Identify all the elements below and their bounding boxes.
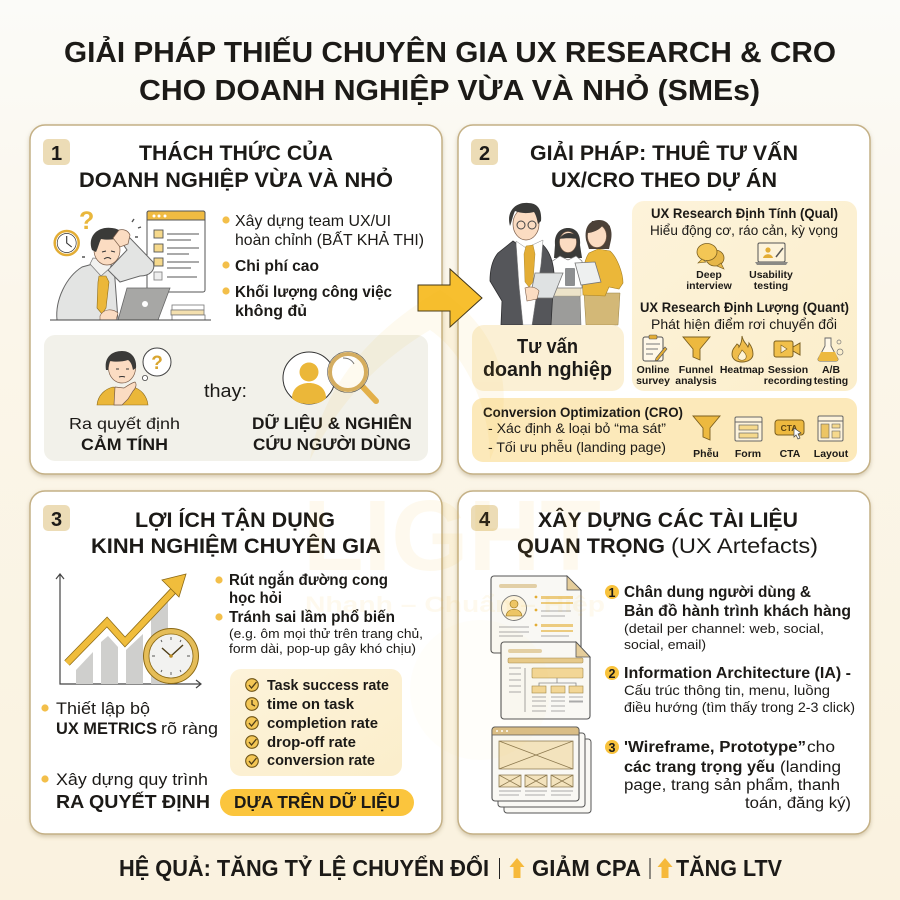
icon: session recording: Session bbox=[768, 364, 808, 376]
icon: cta button: CTA bbox=[780, 448, 801, 460]
item 3: wireframe and prototype: cho bbox=[807, 739, 835, 756]
icon: funnel analysis: analysis bbox=[675, 375, 717, 387]
heading: solution: GIẢI PHÁP: THUÊ TƯ VẤN bbox=[530, 140, 798, 165]
label: business consulting: doanh nghiệp bbox=[483, 358, 612, 381]
footer: results bbox=[119, 853, 783, 881]
heading: artefacts: QUAN TRỌNG bbox=[517, 534, 665, 558]
caption: gut feeling: Ra quyết định bbox=[69, 416, 180, 433]
icon: session recording bbox=[764, 341, 812, 387]
title bbox=[64, 36, 836, 107]
pill: data driven bbox=[220, 789, 414, 816]
icon: cta button: CTA bbox=[781, 423, 797, 433]
label: business consulting bbox=[472, 325, 624, 391]
panel: challenges bbox=[30, 125, 442, 474]
text: instead of: thay: bbox=[204, 381, 247, 401]
watermark: LIGHT bbox=[303, 480, 601, 592]
item 1: persona and journey map: Chân dung người dùng & bbox=[624, 584, 811, 601]
bullet list: challenges: Chi phí cao bbox=[235, 258, 319, 275]
bullet: ux metrics bbox=[41, 699, 218, 738]
icon: usability testing: Usability bbox=[749, 269, 793, 281]
icon: layout: Layout bbox=[814, 448, 849, 460]
item 3: wireframe and prototype: các trang trọng yếu bbox=[624, 759, 775, 776]
bullet list: challenges: không đủ bbox=[235, 303, 307, 320]
icon: usability testing bbox=[749, 243, 793, 292]
bullet list: learning curve and mistakes: form dài, pop-up gây khó chịu) bbox=[229, 642, 416, 656]
bullet: ux metrics: rõ ràng bbox=[161, 719, 218, 738]
panel: solution bbox=[458, 125, 870, 474]
badge 4: 4 bbox=[479, 509, 491, 531]
icon: A/B testing bbox=[814, 338, 848, 387]
bullet list: challenges bbox=[222, 213, 424, 320]
caption: gut feeling bbox=[69, 416, 180, 454]
icon: funnel bbox=[693, 416, 720, 460]
icon: heatmap: Heatmap bbox=[720, 364, 764, 376]
panel: ux research methods bbox=[632, 201, 857, 391]
icon: wireframe stack bbox=[492, 727, 591, 813]
item 1: persona and journey map: Bản đồ hành trình khách hàng bbox=[624, 603, 851, 620]
bullet list: challenges: Xây dựng team UX/UI bbox=[235, 213, 391, 230]
heading: challenges: DOANH NGHIỆP VỪA VÀ NHỎ bbox=[79, 167, 393, 192]
heading: quantitative: UX Research Định Lượng (Quant) bbox=[640, 300, 849, 315]
caption: gut feeling: CẢM TÍNH bbox=[81, 435, 168, 454]
heading: quantitative: Phát hiện điểm rơi chuyển đổi bbox=[651, 317, 837, 332]
icon: session recording: recording bbox=[764, 375, 812, 387]
icon: information architecture document bbox=[501, 642, 590, 719]
badge 1 bbox=[43, 139, 70, 165]
item 3: wireframe and prototype: (landing bbox=[780, 759, 841, 776]
badge 2 bbox=[471, 139, 498, 165]
icon: online survey: Online bbox=[637, 364, 669, 376]
icon: cta button bbox=[775, 420, 804, 460]
heading: benefits: KINH NGHIỆM CHUYÊN GIA bbox=[91, 533, 381, 558]
heading: artefacts bbox=[517, 507, 818, 558]
badge 4 bbox=[471, 505, 498, 531]
icon: thinking person bbox=[97, 348, 171, 405]
caption: data and user research: DỮ LIỆU & NGHIÊN bbox=[252, 413, 412, 433]
footer: results: TĂNG LTV bbox=[676, 854, 783, 881]
bullet: decision process: Xây dựng quy trình bbox=[56, 770, 208, 789]
item 1: persona and journey map: (detail per channel: web, social, bbox=[624, 621, 824, 636]
item 3: wireframe and prototype: 'Wireframe, Prototype” bbox=[624, 739, 806, 756]
card: metrics checklist bbox=[230, 669, 402, 776]
heading: challenges: THÁCH THỨC CỦA bbox=[139, 140, 333, 165]
item 2: information architecture: Cấu trúc thông tin, menu, luồng bbox=[624, 682, 830, 698]
heading: benefits: LỢI ÍCH TẬN DỤNG bbox=[135, 507, 335, 532]
bullet list: learning curve and mistakes: Rút ngắn đường cong bbox=[229, 571, 388, 589]
footer: results: GIẢM CPA bbox=[532, 853, 641, 881]
panel: benefits bbox=[30, 491, 442, 834]
bullet list: learning curve and mistakes bbox=[215, 571, 423, 656]
heading: challenges bbox=[79, 140, 393, 192]
icon: deep interview bbox=[686, 244, 733, 292]
caption: data and user research bbox=[252, 413, 412, 454]
heading: quantitative bbox=[640, 300, 849, 332]
icon: deep interview: Deep bbox=[696, 269, 722, 281]
icon: heatmap bbox=[720, 336, 764, 376]
panel: ux artefacts bbox=[458, 491, 870, 834]
heading: qualitative: Hiểu động cơ, ráo cản, kỳ vọng bbox=[650, 223, 838, 238]
item 2: information architecture: điều hướng (tìm thấy trong 2-3 click) bbox=[624, 699, 855, 715]
heading: qualitative bbox=[650, 206, 838, 238]
icon: thinking person: ? bbox=[151, 353, 163, 374]
panel: conversion optimization bbox=[472, 398, 857, 462]
icon: funnel analysis: Funnel bbox=[679, 364, 713, 376]
bullet: decision process: RA QUYẾT ĐỊNH bbox=[56, 791, 210, 812]
item 3: wireframe and prototype bbox=[605, 739, 851, 812]
item 2: information architecture: 2 bbox=[609, 667, 616, 681]
item 1: persona and journey map: 1 bbox=[609, 586, 616, 600]
icon: form: Form bbox=[735, 448, 761, 460]
watermark bbox=[303, 290, 605, 760]
title: GIẢI PHÁP THIẾU CHUYÊN GIA UX RESEARCH & CRO bbox=[64, 36, 836, 69]
item 3: wireframe and prototype: 3 bbox=[609, 741, 616, 755]
icon: layout bbox=[814, 416, 849, 460]
watermark: Nhanh – Chuẩn – Hiệp bbox=[305, 592, 605, 617]
badge 2: 2 bbox=[479, 143, 490, 165]
icon: user research magnifier bbox=[283, 352, 376, 404]
item 3: wireframe and prototype: page, trang sản phẩm, thanh bbox=[624, 777, 840, 794]
title: CHO DOANH NGHIỆP VỪA VÀ NHỎ (SMEs) bbox=[139, 74, 760, 107]
heading: artefacts: (UX Artefacts) bbox=[671, 534, 818, 558]
card: metrics checklist: Task success rate bbox=[267, 678, 389, 694]
card: metrics checklist: completion rate bbox=[267, 716, 378, 732]
card: metrics checklist: drop-off rate bbox=[267, 735, 356, 751]
caption: data and user research: CỨU NGƯỜI DÙNG bbox=[253, 435, 411, 454]
icon: funnel analysis bbox=[675, 337, 717, 387]
icon: deep interview: interview bbox=[686, 280, 733, 292]
heading: solution bbox=[530, 140, 798, 192]
icon: usability testing: testing bbox=[754, 280, 788, 292]
bullet: decision process bbox=[41, 770, 210, 812]
illustration: worried worker at desk: ? bbox=[79, 207, 94, 235]
icon: A/B testing: A/B bbox=[822, 364, 840, 376]
item 2: information architecture bbox=[605, 665, 855, 715]
text: cro bbox=[483, 405, 683, 455]
icon: A/B testing: testing bbox=[814, 375, 848, 387]
badge 1: 1 bbox=[51, 143, 62, 165]
bullet list: challenges: Khối lượng công việc bbox=[235, 284, 392, 301]
heading: artefacts: XÂY DỰNG CÁC TÀI LIỆU bbox=[538, 507, 798, 532]
icon: online survey: survey bbox=[636, 375, 670, 387]
illustration: worried worker at desk bbox=[50, 207, 211, 320]
label: business consulting: Tư vấn bbox=[517, 335, 578, 358]
icon: funnel: Phễu bbox=[693, 447, 719, 460]
chart: growth with clock bbox=[56, 574, 201, 688]
bullet list: learning curve and mistakes: (e.g. ôm mọi thử trên trang chủ, bbox=[229, 627, 423, 641]
bullet list: challenges: hoàn chỉnh (BẤT KHẢ THI) bbox=[235, 230, 424, 249]
icon: persona document bbox=[491, 576, 581, 653]
bullet list: learning curve and mistakes: học hỏi bbox=[229, 590, 282, 607]
illustration: consultants bbox=[490, 203, 623, 325]
card: metrics checklist: time on task bbox=[267, 697, 355, 713]
badge 3 bbox=[43, 505, 70, 531]
text: cro: - Xác định & loại bỏ “ma sát” bbox=[488, 421, 666, 436]
arrow: challenges to solution bbox=[418, 269, 482, 327]
icon: online survey bbox=[636, 335, 670, 387]
bullet: ux metrics: Thiết lập bộ bbox=[56, 699, 150, 718]
text: cro: - Tối ưu phễu (landing page) bbox=[488, 440, 666, 455]
card: metrics checklist: conversion rate bbox=[267, 753, 375, 769]
badge 3: 3 bbox=[51, 509, 62, 531]
heading: benefits bbox=[91, 507, 381, 558]
footer: results: HỆ QUẢ: TĂNG TỶ LỆ CHUYỂN ĐỔI bbox=[119, 853, 489, 881]
item 1: persona and journey map bbox=[605, 584, 851, 652]
bullet: ux metrics: UX METRICS bbox=[56, 719, 157, 738]
text: cro: Conversion Optimization (CRO) bbox=[483, 405, 683, 420]
item 3: wireframe and prototype: toán, đăng ký) bbox=[745, 795, 851, 812]
heading: solution: UX/CRO THEO DỰ ÁN bbox=[551, 167, 777, 192]
comparison box: gut feeling vs data bbox=[44, 335, 428, 461]
icon: form bbox=[735, 417, 762, 460]
item 1: persona and journey map: social, email) bbox=[624, 637, 706, 652]
pill: data driven: DỰA TRÊN DỮ LIỆU bbox=[234, 791, 400, 812]
heading: qualitative: UX Research Định Tính (Qual) bbox=[651, 206, 838, 221]
bullet list: learning curve and mistakes: Tránh sai lầm phổ biến bbox=[229, 609, 395, 626]
item 2: information architecture: Information Architecture (IA) - bbox=[624, 665, 851, 682]
